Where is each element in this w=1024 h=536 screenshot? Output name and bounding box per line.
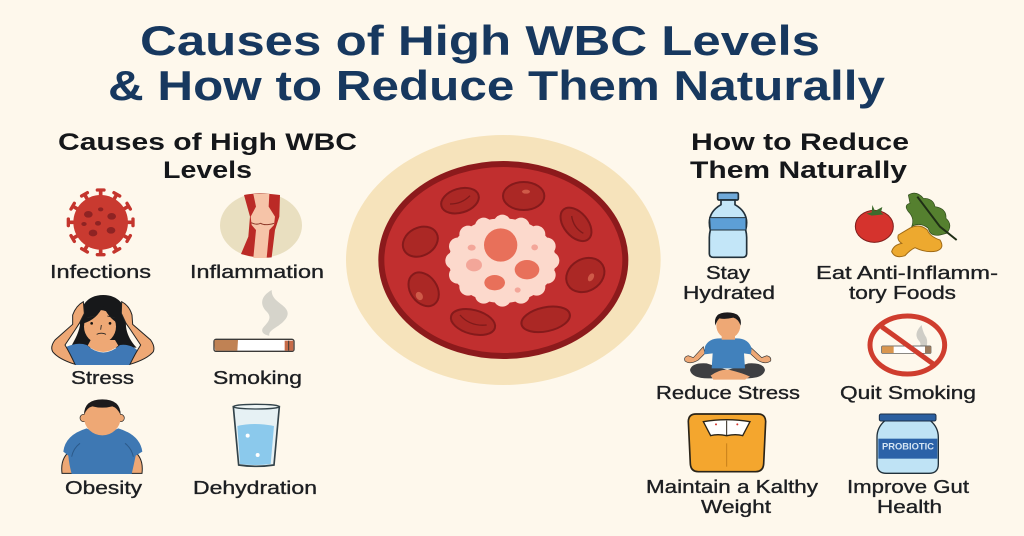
label: Stay Hydrated [683,262,775,303]
icon: water bottle [709,193,747,257]
label: Obesity: Obesity [65,477,143,498]
label: Reduce Stress: Reduce Stress [656,382,800,403]
label: Maintain a Healthy Weight [646,476,819,517]
icon: weight scale [688,414,766,472]
icon: obese person [62,399,142,474]
label: Improve Gut Health: Health [877,496,942,517]
icon: probiotic jar [877,414,938,473]
label: Eat Anti-Inflammatory Foods: tory Foods [849,282,956,303]
label: Infections: Infections [50,261,151,282]
white blood cell [445,215,559,307]
icon: inflamed joint [220,193,302,258]
label: Stay Hydrated: Stay [706,262,751,283]
icon: probiotic jar: PROBIOTIC [882,442,935,452]
label: Maintain a Healthy Weight: Maintain a Kalthy [646,476,819,497]
heading: how to reduce [690,129,909,184]
label: Eat Anti-Inflammatory Foods [816,262,998,303]
label: Dehydration: Dehydration [193,477,317,498]
label: Improve Gut Health [847,476,969,517]
panel: how to reduce [646,193,998,517]
heading: causes: Causes of High WBC [58,129,357,156]
heading: causes [58,129,357,184]
title: & How to Reduce Them Naturally [108,62,886,109]
label: Stress: Stress [71,367,134,388]
title [108,17,886,109]
label: Maintain a Healthy Weight: Weight [701,496,771,517]
icon: virus [68,190,133,255]
central illustration: blood cells [346,135,661,385]
heading: causes: Levels [163,157,252,184]
label: Eat Anti-Inflammatory Foods: Eat Anti-Inflamm- [816,262,998,283]
heading: how to reduce: Them Naturally [690,157,907,184]
label: Smoking: Smoking [213,367,302,388]
icon: cigarette with smoke [214,290,294,351]
icon: no smoking [870,316,945,374]
label: Stay Hydrated: Hydrated [683,282,775,303]
icon: stressed person [52,295,154,365]
icon: anti-inflammatory foods [855,193,957,257]
panel: causes [50,190,324,498]
title: Causes of High WBC Levels [140,17,820,64]
icon: glass of water [233,404,279,466]
icon: meditating person [685,312,771,380]
label: Inflammation: Inflammation [190,261,324,282]
label: Improve Gut Health: Improve Gut [847,476,969,497]
heading: how to reduce: How to Reduce [691,129,909,156]
label: Quit Smoking: Quit Smoking [840,382,976,403]
